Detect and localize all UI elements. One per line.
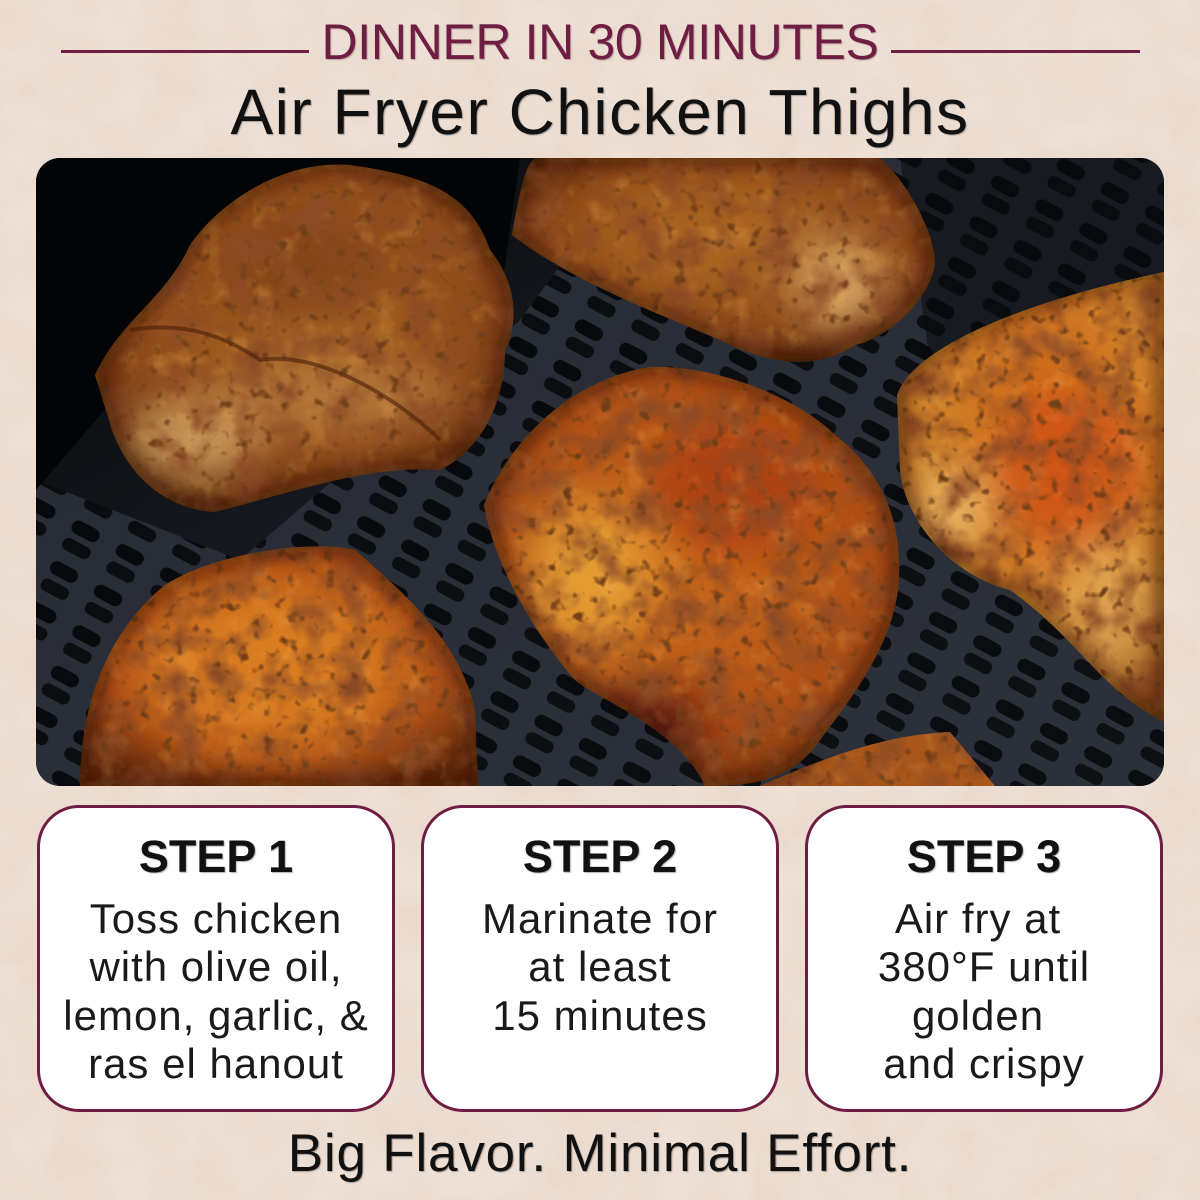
step 3 text: Air fry at xyxy=(895,895,1061,942)
photo: air-fried chicken thighs in basket xyxy=(36,158,1164,786)
basket xyxy=(36,158,1164,786)
step 3 card xyxy=(805,805,1163,1112)
step 3 text: 380°F until xyxy=(878,943,1090,990)
step 2 text: 15 minutes xyxy=(492,992,708,1039)
chicken thigh right xyxy=(897,272,1164,722)
step 1 text: ras el hanout xyxy=(88,1040,344,1087)
chicken thigh centre xyxy=(484,367,899,786)
step 2 text xyxy=(482,895,718,1039)
step 3 text: golden xyxy=(912,992,1044,1039)
header rule left xyxy=(61,50,309,53)
step 2 text: Marinate for xyxy=(482,895,718,942)
step 3 heading: STEP 3 xyxy=(907,831,1061,882)
step 2 text: at least xyxy=(528,943,672,990)
step 1 card xyxy=(37,805,395,1112)
chicken thigh top centre xyxy=(512,158,935,362)
chicken thigh lower left xyxy=(80,546,478,786)
title: Air Fryer Chicken Thighs xyxy=(230,76,970,148)
step 1 text xyxy=(63,895,369,1087)
tagline: Big Flavor. Minimal Effort. xyxy=(288,1124,912,1183)
step 1 heading: STEP 1 xyxy=(139,831,293,882)
step 2 heading: STEP 2 xyxy=(523,831,677,882)
step 1 text: lemon, garlic, & xyxy=(63,992,369,1039)
skin highlights and texture xyxy=(36,158,1164,786)
step 1 text: Toss chicken xyxy=(90,895,342,942)
step 2 card xyxy=(421,805,779,1112)
chicken thigh bottom edge xyxy=(760,732,995,786)
step 3 text xyxy=(878,895,1090,1087)
header rule right xyxy=(891,50,1140,53)
step 3 text: and crispy xyxy=(883,1040,1085,1087)
chicken thigh upper left xyxy=(95,165,513,512)
kicker heading: DINNER IN 30 MINUTES xyxy=(322,14,878,70)
step 1 text: with olive oil, xyxy=(89,943,343,990)
